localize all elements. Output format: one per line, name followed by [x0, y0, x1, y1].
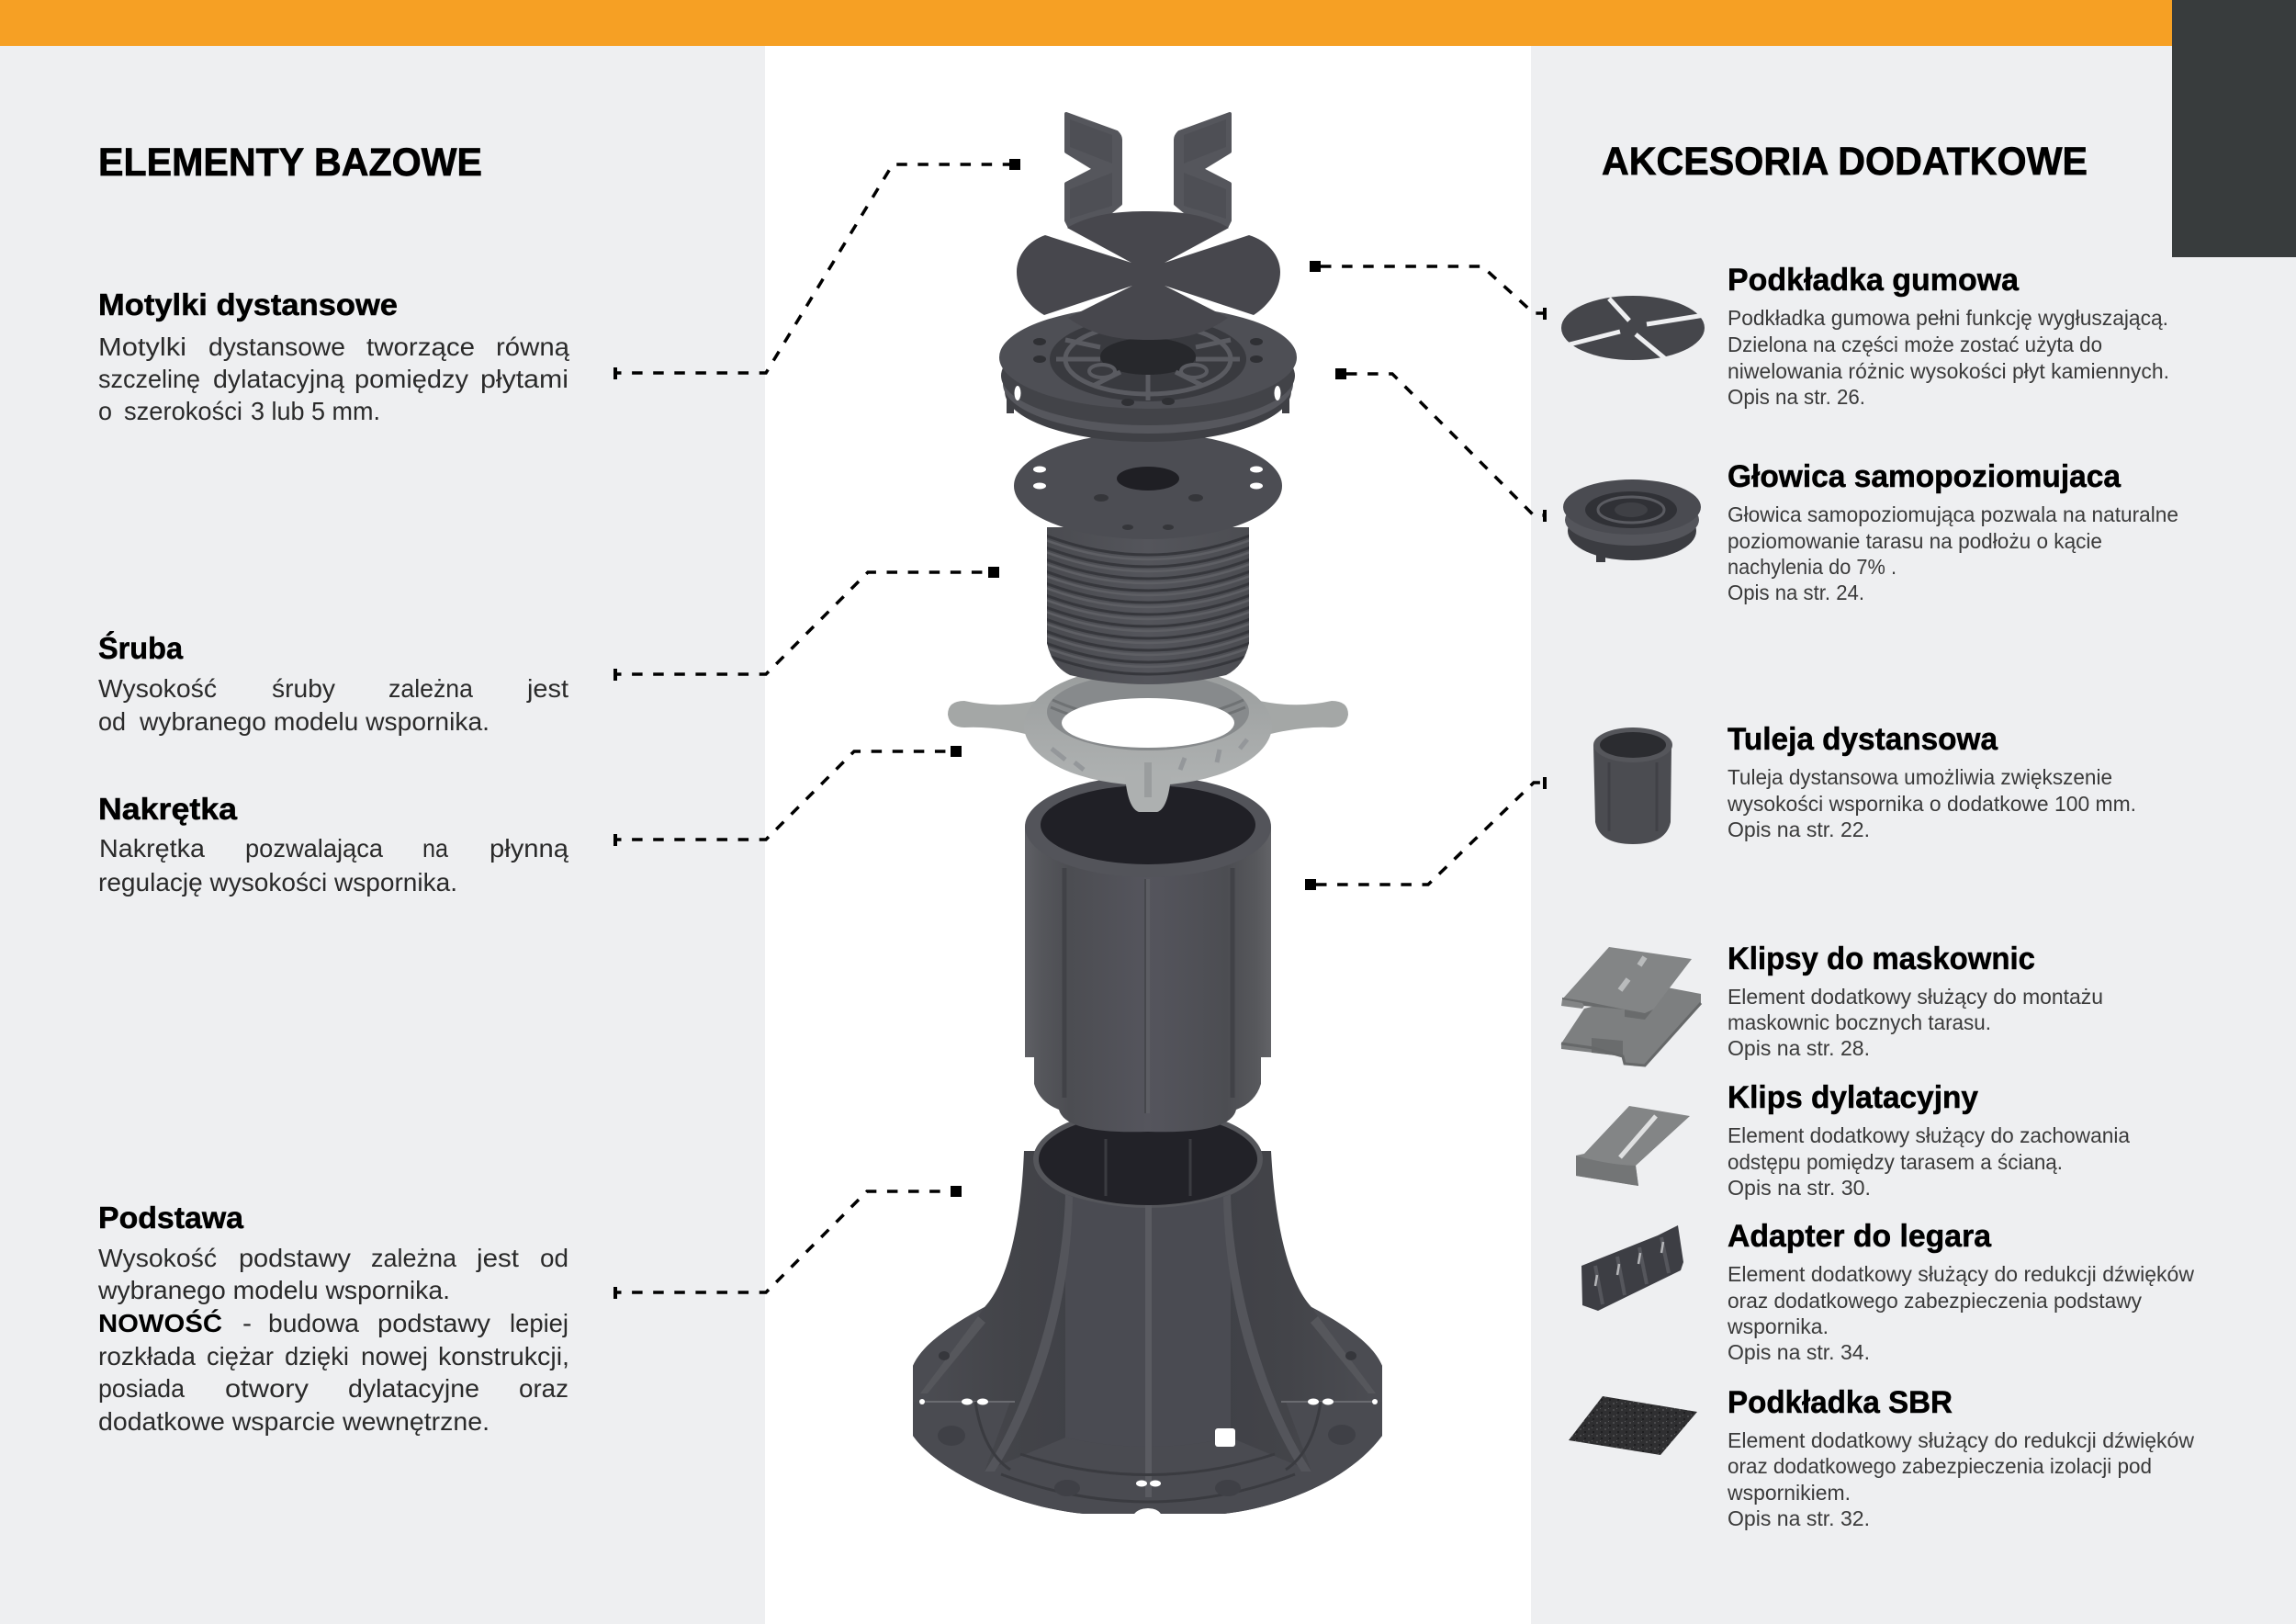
text block: podstawa: wybranego modelu wspornika. [97, 1276, 450, 1304]
text block: podstawa: Wysokość [98, 1244, 217, 1272]
text block: głowica samopoziomująca: Głowica samopoziomująca pozwala na naturalne [1728, 502, 2178, 526]
chart: exploded pedestal [913, 114, 1382, 1514]
panel: right background [1531, 46, 2296, 1624]
text block: adapter do legara: wspornika. [1727, 1314, 1829, 1338]
text block: motylki dystansowe: szczelinę [98, 365, 200, 393]
text block: klipsy do maskownic: maskownic bocznych tarasu. [1728, 1010, 1991, 1034]
text block: tuleja dystansowa: Tuleja dystansowa umożliwia zwiększenie [1728, 765, 2112, 789]
text block: głowica samopoziomująca: nachylenia do 7% . [1728, 555, 1896, 579]
text block: motylki dystansowe: szerokości [124, 397, 242, 425]
text block: nakrętka: pozwalająca [245, 834, 383, 863]
text block: podstawa: NOWOŚĆ [98, 1309, 222, 1337]
text block: podstawa: zależna [371, 1244, 456, 1272]
text block: podkładka gumowa: Opis na str. 26. [1728, 385, 1865, 409]
heading: elementy bazowe: ELEMENTY BAZOWE [98, 141, 482, 185]
panel: akcesoria dodatkowe [1561, 140, 2194, 1530]
text block: adapter do legara: Opis na str. 34. [1728, 1340, 1870, 1364]
panel: elementy bazowe text [97, 141, 569, 1436]
text block: podstawa: rozkłada [98, 1342, 196, 1370]
text block: klips dylatacyjny: Opis na str. 30. [1728, 1176, 1871, 1200]
text block: podstawa [97, 1201, 569, 1436]
part: rubber pad [1017, 211, 1280, 340]
text block: głowica samopoziomująca: poziomowanie tarasu na podłożu o kącie [1728, 529, 2102, 553]
part: spacer butterflies [1066, 114, 1230, 226]
text block: nakrętka: regulację wysokości wspornika. [98, 868, 457, 897]
icon: spacer tube [1593, 727, 1672, 844]
orange top bar [0, 0, 2172, 46]
text block: podstawa: - [242, 1309, 252, 1337]
text block: nakrętka: Nakrętka [98, 792, 238, 826]
text block: podstawa: jest [476, 1244, 519, 1272]
text block: podkładka gumowa [1728, 263, 2169, 409]
text block: motylki dystansowe: równą [496, 333, 569, 361]
icon: SBR pad [1569, 1396, 1697, 1455]
text block: podkładka gumowa: Podkładka gumowa pełni funkcję wygłuszającą. [1728, 306, 2168, 330]
text block: nakrętka [98, 792, 568, 897]
text block: podstawa: dodatkowe wsparcie wewnętrzne. [98, 1407, 490, 1436]
icon: expansion clip [1576, 1106, 1690, 1186]
text block: podstawa: otwory [225, 1374, 309, 1403]
dark corner block [2172, 0, 2296, 257]
text block: podstawa: Podstawa [98, 1201, 244, 1235]
text block: klipsy do maskownic [1728, 942, 2103, 1060]
text block: nakrętka: płynną [490, 834, 568, 863]
text block: motylki dystansowe: dystansowe [208, 333, 345, 361]
text block: klipsy do maskownic: Opis na str. 28. [1728, 1036, 1870, 1060]
text block: podstawa: podstawy [239, 1244, 351, 1272]
arrow: podstawa connector [613, 1186, 962, 1299]
text block: śruba: Śruba [98, 631, 184, 665]
text block: podstawa: lepiej [510, 1309, 568, 1337]
text block: śruba: zależna [388, 674, 473, 703]
text block: śruba: Wysokość [98, 674, 217, 703]
text block: podkładka SBR: Opis na str. 32. [1728, 1506, 1870, 1530]
text block: podkładka SBR [1727, 1385, 2194, 1530]
text block: adapter do legara [1727, 1219, 2194, 1364]
text block: podstawa: budowa [268, 1309, 359, 1337]
text block: podkładka SBR: wspornikiem. [1727, 1481, 1851, 1505]
arrow: motylki connector [613, 159, 1020, 379]
text block: tuleja dystansowa: wysokości wspornika o dodatkowe 100 mm. [1727, 792, 2136, 816]
text block: adapter do legara: Element dodatkowy służący do redukcji dźwięków [1728, 1262, 2194, 1286]
text block: podstawa: od [540, 1244, 568, 1272]
part: nut [948, 666, 1348, 812]
text block: podkładka gumowa: niwelowania różnic wysokości płyt kamiennych. [1728, 359, 2169, 383]
text block: motylki dystansowe [98, 288, 569, 425]
text block: podstawa: dylatacyjne [348, 1374, 479, 1403]
part: lower plate [1014, 433, 1282, 539]
text block: podstawa: konstrukcji, [438, 1342, 569, 1370]
heading: akcesoria dodatkowe: AKCESORIA DODATKOWE [1602, 140, 2088, 184]
text block: tuleja dystansowa: Opis na str. 22. [1728, 818, 1870, 841]
icon: rubber pad [1561, 296, 1705, 360]
text block: adapter do legara: Adapter do legara [1728, 1219, 1992, 1254]
text block: śruba: śruby [272, 674, 335, 703]
text block: klipsy do maskownic: Element dodatkowy służący do montażu [1728, 985, 2103, 1009]
arrow: głowica connector [1335, 368, 1547, 522]
text block: podkładka gumowa: Dzielona na części może zostać użyta do [1728, 333, 2102, 356]
arrow: nakrętka connector [613, 746, 962, 846]
text block: głowica samopoziomująca: Opis na str. 24. [1728, 581, 1864, 604]
text block: klips dylatacyjny [1728, 1080, 2130, 1200]
part: tube [1025, 776, 1271, 1132]
text block: śruba: wybranego modelu wspornika. [139, 707, 490, 736]
icon: joist adapter [1581, 1225, 1683, 1311]
text block: motylki dystansowe: płytami [480, 365, 568, 393]
text block: podstawa: nowej [361, 1342, 428, 1370]
part: self-levelling head [999, 306, 1297, 442]
text block: motylki dystansowe: pomiędzy [355, 365, 468, 393]
arrow: śruba connector [613, 567, 999, 681]
text block: tuleja dystansowa [1727, 722, 2136, 841]
part: base [913, 1108, 1382, 1514]
text block: podstawa: podstawy [377, 1309, 490, 1337]
text block: motylki dystansowe: Motylki [98, 333, 186, 361]
text block: podstawa: posiada [98, 1374, 185, 1403]
text block: podkładka SBR: Element dodatkowy służący do redukcji dźwięków [1728, 1428, 2194, 1452]
text block: motylki dystansowe: o [98, 397, 112, 425]
part: threaded screw [1047, 527, 1249, 684]
text block: podstawa: dzięki [285, 1342, 349, 1370]
text block: klips dylatacyjny: Klips dylatacyjny [1728, 1080, 1978, 1115]
text block: śruba: jest [526, 674, 568, 703]
text block: śruba: od [98, 707, 126, 736]
icon: facia clips [1561, 947, 1701, 1066]
text block: nakrętka: na [422, 834, 448, 863]
text block: motylki dystansowe: Motylki dystansowe [98, 288, 398, 321]
text block: śruba [98, 631, 568, 736]
text block: tuleja dystansowa: Tuleja dystansowa [1728, 722, 1998, 757]
text block: motylki dystansowe: tworzące [366, 333, 475, 361]
text block: podkładka SBR: oraz dodatkowego zabezpieczenia izolacji pod [1728, 1454, 2152, 1478]
text block: klips dylatacyjny: odstępu pomiędzy tarasem a ścianą. [1728, 1150, 2063, 1174]
text block: motylki dystansowe: dylatacyjną [213, 365, 344, 393]
text block: podkładka SBR: Podkładka SBR [1728, 1385, 1953, 1420]
icon: self-levelling head [1563, 479, 1701, 562]
text block: podkładka gumowa: Podkładka gumowa [1728, 263, 2020, 298]
text block: adapter do legara: oraz dodatkowego zabezpieczenia podstawy [1728, 1289, 2142, 1313]
arrow: podkładka gumowa connector [1310, 261, 1547, 320]
text block: głowica samopoziomująca [1728, 459, 2178, 604]
text block: klips dylatacyjny: Element dodatkowy służący do zachowania [1728, 1123, 2130, 1147]
text block: motylki dystansowe: 3 lub 5 mm. [251, 397, 380, 425]
arrow: tuleja connector [1305, 777, 1547, 890]
text block: głowica samopoziomująca: Głowica samopoziomujaca [1728, 459, 2122, 494]
text block: nakrętka: Nakrętka [99, 834, 205, 863]
panel: left background [0, 46, 765, 1624]
text block: podstawa: ciężar [207, 1342, 274, 1370]
text block: klipsy do maskownic: Klipsy do maskownic [1728, 942, 2035, 976]
text block: podstawa: oraz [519, 1374, 568, 1403]
